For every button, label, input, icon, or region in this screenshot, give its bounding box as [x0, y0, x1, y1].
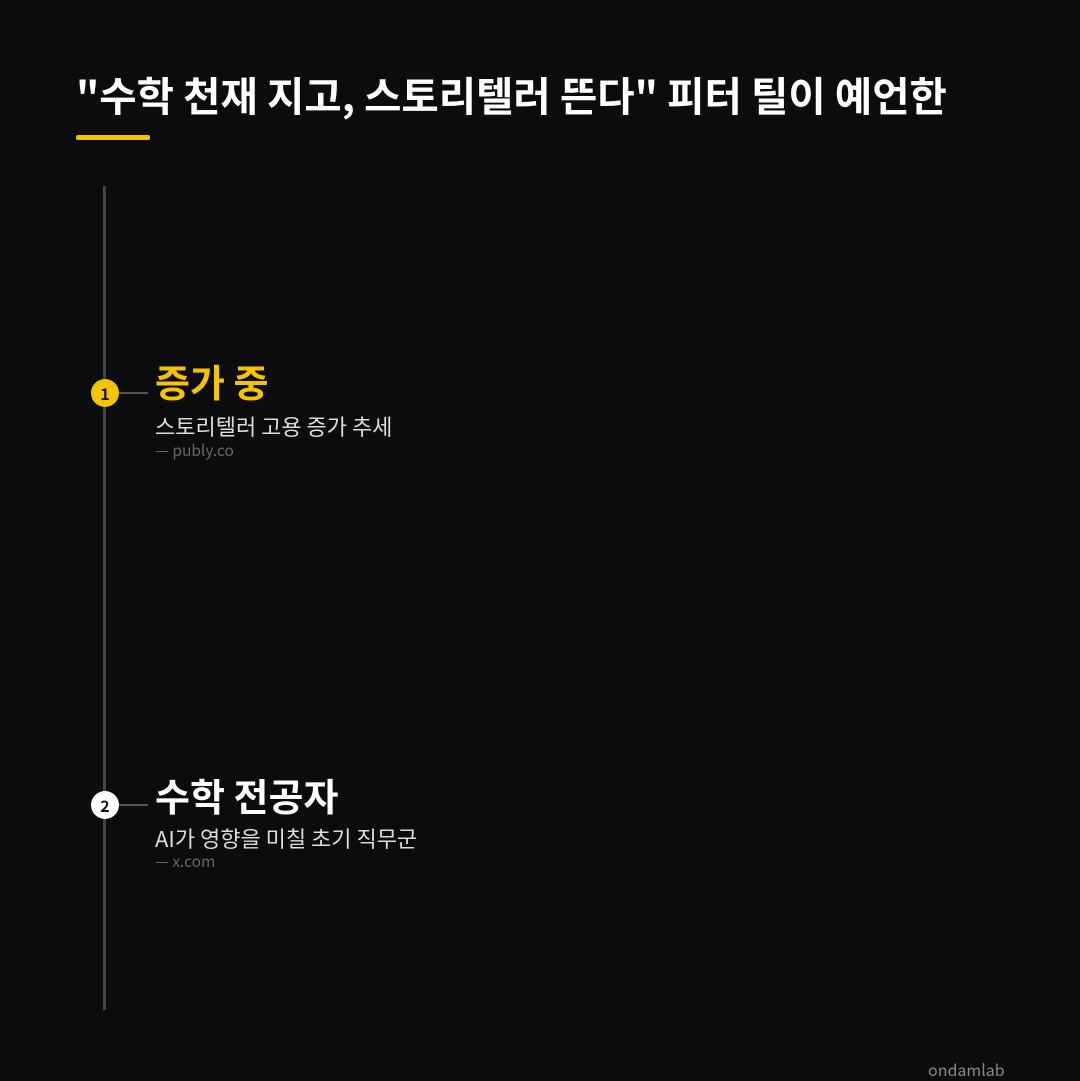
source 2: — x.com: [155, 850, 215, 872]
heading 1: 증가 중: [155, 353, 269, 408]
marker 1: [91, 379, 119, 407]
title underline: [76, 135, 150, 140]
title: "수학 천재 지고, 스토리텔러 뜬다" 피터 틸이 예언한: [76, 64, 947, 123]
footer brand: ondamlab: [928, 1057, 1005, 1081]
timeline line: [103, 186, 106, 1010]
subtitle 2: AI가 영향을 미칠 초기 직무군: [155, 822, 417, 854]
connector 2: [119, 804, 148, 806]
connector 1: [119, 392, 148, 394]
marker 2: [91, 791, 119, 819]
marker 2: 2: [100, 793, 110, 817]
marker 1: 1: [100, 381, 110, 405]
heading 2: 수학 전공자: [155, 767, 338, 822]
source 1: — publy.co: [155, 439, 234, 461]
item 1: [91, 353, 392, 461]
item 2: [91, 767, 417, 872]
subtitle 1: 스토리텔러 고용 증가 추세: [155, 410, 392, 442]
